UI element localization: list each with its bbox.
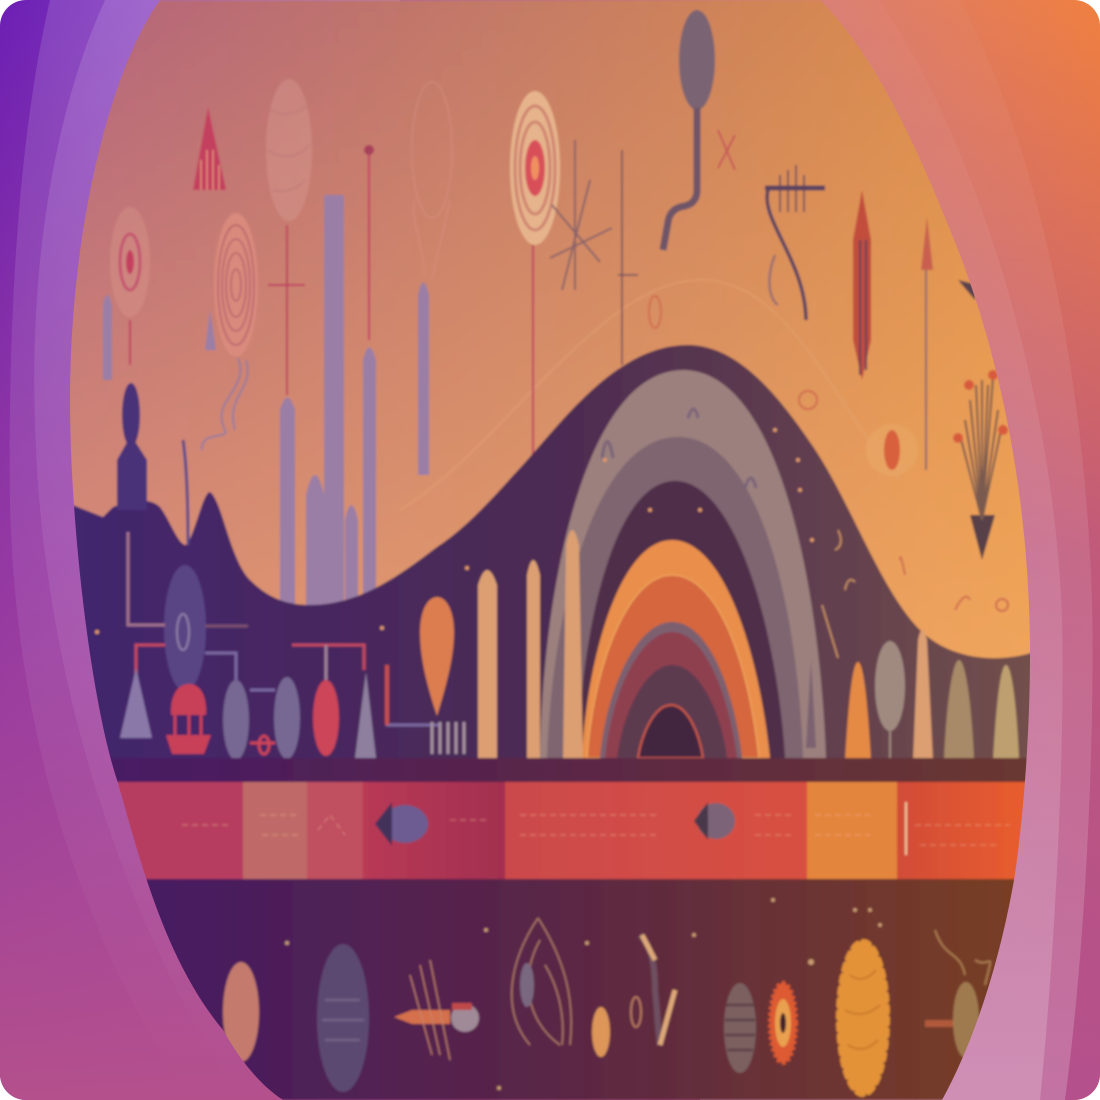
- creature: [631, 935, 675, 1045]
- tan hives: [944, 660, 1019, 760]
- faint outlined balloon: [412, 82, 452, 280]
- arch: inner dark: [617, 665, 727, 758]
- red thin lines: [128, 154, 536, 455]
- red triangle: [193, 107, 226, 190]
- machine disc: [164, 565, 206, 691]
- red ring connector: [250, 736, 275, 754]
- rainbow arch: [540, 370, 826, 758]
- red dome: [166, 684, 211, 754]
- arch: gray band: [600, 622, 742, 758]
- small dark dart: [958, 280, 978, 300]
- red timeline band: [100, 782, 1037, 879]
- thin tower: [921, 217, 933, 470]
- red cross: [718, 130, 735, 170]
- target disc: [510, 91, 560, 245]
- orange cone: [845, 662, 871, 760]
- dark spire tower: [117, 383, 147, 510]
- striped planet: [724, 983, 756, 1073]
- dark balloon with stem: [663, 10, 715, 250]
- dark hills: [60, 345, 1040, 782]
- line shell: [512, 918, 571, 1045]
- gray capsule left: [223, 680, 249, 760]
- starburst: [550, 140, 612, 290]
- stars: [95, 428, 814, 634]
- orange pebble: [592, 1007, 610, 1057]
- arch: dark starry band: [578, 481, 785, 758]
- moons: [822, 530, 855, 658]
- fire flower: [770, 983, 796, 1063]
- left inner side band: [34, 0, 313, 798]
- right inner side band: [700, 272, 1062, 1100]
- band capsule icon right: [694, 802, 735, 840]
- spoon stem: [183, 440, 188, 545]
- gray capsule right: [274, 677, 300, 759]
- vertical needle: [618, 150, 638, 365]
- rocket: [394, 960, 479, 1060]
- round tree: [875, 641, 905, 758]
- dark ground strip: [60, 758, 1040, 782]
- band needle: [905, 802, 907, 855]
- small stars: [285, 898, 882, 1090]
- picket fence: [432, 722, 464, 754]
- sun burst: [884, 430, 900, 470]
- band capsule icon left: [375, 802, 428, 846]
- arch: outer gray: [540, 370, 826, 758]
- machine pipes: [128, 532, 440, 725]
- arch: orange band: [582, 540, 770, 758]
- planet violet: [317, 944, 369, 1092]
- arch: second band: [547, 437, 803, 758]
- coral bar: [925, 1020, 955, 1027]
- sky wave line: [400, 280, 900, 510]
- big scalloped flower: [839, 942, 887, 1094]
- left outer side band: [10, 0, 313, 814]
- cone tassel left: [120, 668, 152, 738]
- tan spires: [478, 530, 933, 760]
- squiggle strands: [202, 358, 248, 450]
- arch glyphs: [602, 409, 756, 488]
- tassel right: [355, 672, 376, 758]
- flower fan: [953, 370, 1008, 560]
- spiral planet: [214, 213, 258, 357]
- red tower: [853, 190, 871, 380]
- pillars: [103, 195, 429, 610]
- small target: [110, 207, 150, 317]
- hook ornament: [765, 165, 825, 320]
- red squiggle: [385, 665, 389, 725]
- band markings: [182, 815, 1010, 845]
- small orange sky glyphs: [649, 296, 1008, 611]
- right outer side band: [700, 226, 1092, 1100]
- sky: [60, 0, 1040, 700]
- arch: innermost: [638, 705, 703, 758]
- arch: crimson band: [605, 632, 737, 758]
- lattice orb: [935, 930, 990, 1058]
- faint planet: [266, 79, 312, 221]
- gray dark needle: [806, 660, 816, 748]
- small top marker: [364, 145, 374, 155]
- arch: red orange band: [587, 575, 759, 758]
- planet tan: [223, 962, 259, 1062]
- red capsule: [313, 680, 339, 756]
- lower dark panel: [60, 879, 1040, 1100]
- orange drop balloon: [420, 597, 454, 716]
